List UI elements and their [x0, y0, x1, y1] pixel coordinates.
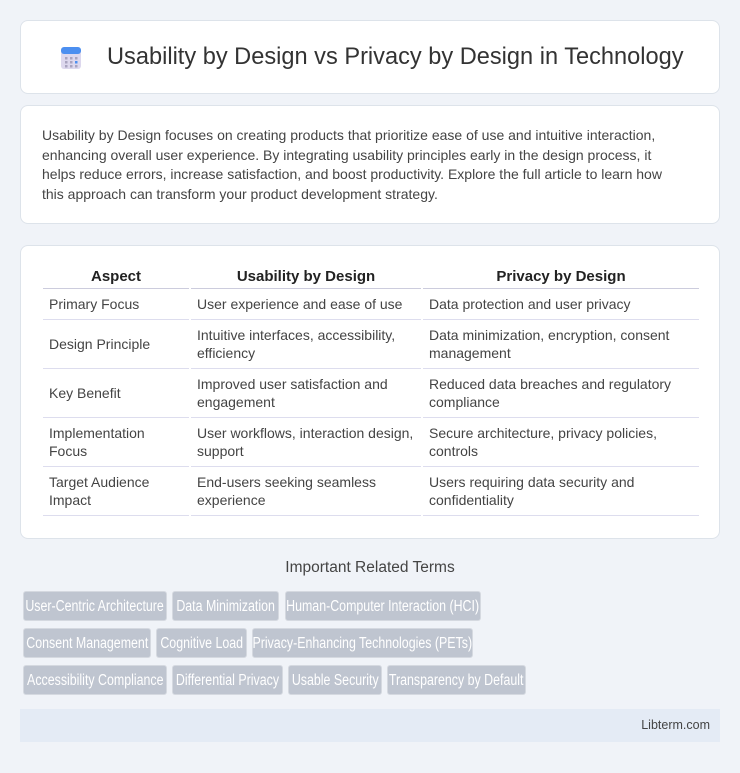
- header card: [20, 20, 720, 94]
- intro text card: Usability by Design focuses on creating products that prioritize ease of use and intuitive interaction, enhancing overall user experience. By integrating usability principles early in the design process, it helps reduce errors, increase satisfaction, and boost productivity. Explore the full article to learn how this approach can transform your product development strategy.: [42, 127, 662, 202]
- comparison table card: Aspect: [91, 268, 141, 284]
- comparison table card: Reduced data breaches and regulatory compliance: [429, 376, 671, 410]
- related terms tags: Cognitive Load: [160, 635, 243, 652]
- related terms tags: Privacy-Enhancing Technologies (PETs): [253, 635, 472, 652]
- comparison table card: User experience and ease of use: [197, 296, 402, 312]
- related terms tags: User-Centric Architecture: [26, 598, 164, 615]
- related terms tags: Consent Management: [26, 635, 148, 652]
- related terms heading: Important Related Terms: [285, 559, 455, 576]
- footer: Libterm.com: [641, 718, 710, 732]
- comparison table card: Privacy by Design: [496, 268, 626, 284]
- comparison table card: Design Principle: [49, 336, 150, 352]
- related terms tags: Usable Security: [292, 672, 378, 689]
- related terms tags: Human-Computer Interaction (HCI): [287, 598, 479, 615]
- related terms tags: Accessibility Compliance: [27, 672, 163, 689]
- icon: calendar: [61, 47, 81, 69]
- comparison table card: Key Benefit: [49, 385, 121, 401]
- comparison table card: Users requiring data security and confidentiality: [429, 474, 634, 508]
- comparison table card: Data protection and user privacy: [429, 296, 631, 312]
- related terms tags: Differential Privacy: [176, 672, 279, 689]
- comparison table card: [20, 245, 720, 539]
- comparison table card: Primary Focus: [49, 296, 139, 312]
- footer: [20, 709, 720, 742]
- comparison table card: User workflows, interaction design, support: [197, 425, 413, 459]
- intro text card: [20, 105, 720, 224]
- comparison table card: Data minimization, encryption, consent management: [429, 327, 669, 361]
- comparison table card: Implementation Focus: [49, 425, 145, 459]
- related terms tags: Transparency by Default: [389, 672, 524, 689]
- comparison table card: Improved user satisfaction and engagement: [197, 376, 388, 410]
- comparison table card: Usability by Design: [237, 268, 375, 284]
- comparison table card: End-users seeking seamless experience: [197, 474, 376, 508]
- comparison table card: Secure architecture, privacy policies, controls: [429, 425, 657, 459]
- comparison table card: Intuitive interfaces, accessibility, efficiency: [197, 327, 395, 361]
- title: Usability by Design vs Privacy by Design in Technology: [107, 44, 684, 70]
- related terms tags: Data Minimization: [176, 598, 275, 615]
- comparison table card: Target Audience Impact: [49, 474, 149, 508]
